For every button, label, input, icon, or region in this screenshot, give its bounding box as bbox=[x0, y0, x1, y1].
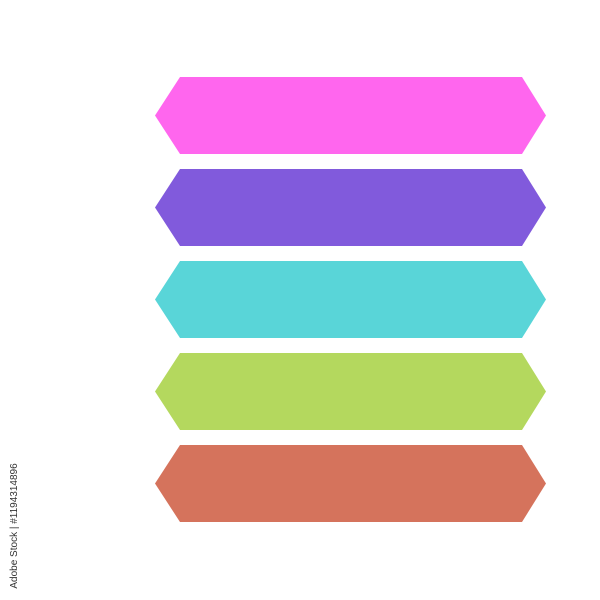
vertical stock id text: Adobe Stock | #1194314896 bbox=[9, 463, 20, 589]
banner 5: orange-brown bbox=[155, 445, 546, 522]
banner 3: cyan bbox=[155, 261, 546, 338]
banner 2: purple bbox=[155, 169, 546, 246]
banner 4: green bbox=[155, 353, 546, 430]
banner 1: pink bbox=[155, 77, 546, 154]
